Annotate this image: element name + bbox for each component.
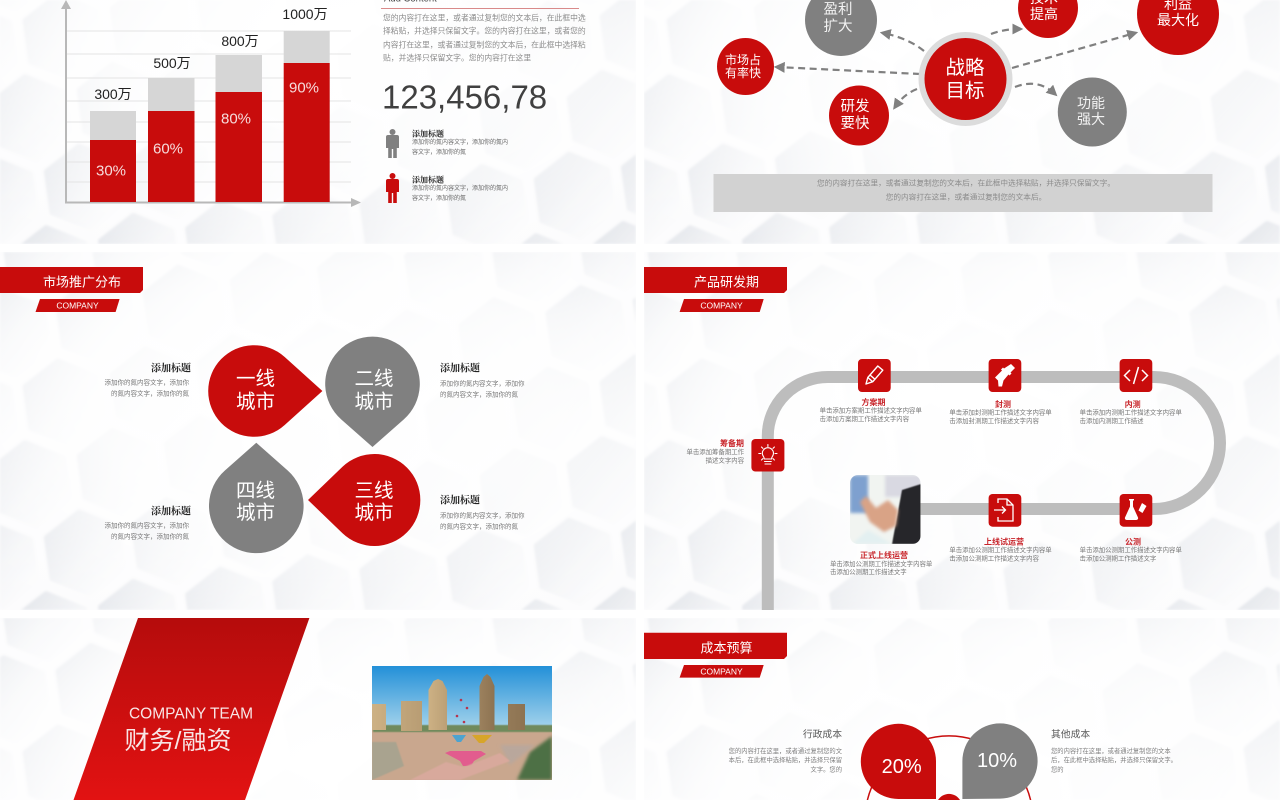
bar chart: 800万 xyxy=(221,33,259,49)
text block: tier three label: 添加标题 xyxy=(440,494,480,506)
text block: 封测: 击添加封测期工作描述文字内容 xyxy=(949,416,1039,425)
bar chart: 90% xyxy=(289,80,319,96)
chart: cost shares xyxy=(861,723,1038,800)
text block: 方案期: 击添加方案期工作描述文字内容 xyxy=(820,414,910,423)
text block: 内测: 击添加内测期工作描述 xyxy=(1080,416,1144,425)
legend: red person xyxy=(386,173,508,203)
text block: tier three label: 添加你的氮内容文字，添加你 xyxy=(440,510,525,520)
text block: 行政成本: 文字。您的 xyxy=(811,764,842,774)
node: 研发要快: 要快 xyxy=(840,115,870,132)
drop: 10%: 10% xyxy=(977,750,1017,772)
text block: 其他成本: 您的 xyxy=(1051,764,1064,774)
text block: add content xyxy=(381,0,586,62)
text block: 正式上线运营: 单击添加公测期工作描述文字内容单 xyxy=(830,559,933,568)
icon: pencil step xyxy=(858,359,891,392)
legend: gray person: 容文字，添加你的氮 xyxy=(412,148,466,156)
text block: 封测: 封测 xyxy=(995,399,1011,409)
node: central goal xyxy=(918,32,1012,126)
drop: 一线城市: 一线 xyxy=(236,368,275,390)
node: 市场占有率快 xyxy=(717,38,774,95)
text block: 上线试运营: 上线试运营 xyxy=(984,536,1024,546)
node: 利益最大化: 最大化 xyxy=(1157,12,1199,28)
panel: product development slide background xyxy=(644,252,1280,610)
icon: file step xyxy=(989,494,1021,527)
bar chart: 60% xyxy=(153,140,183,158)
track: development roadmap xyxy=(768,377,1220,610)
callout: gray text box xyxy=(714,174,1212,212)
node: central goal: 战略 xyxy=(945,57,985,79)
node: 功能强大 xyxy=(1058,78,1127,146)
text block: tier one label: 添加标题 xyxy=(151,362,191,374)
text block: 公测 xyxy=(1080,536,1182,562)
text block: tier two label: 的氮内容文字，添加你的氮 xyxy=(440,390,518,398)
text block: 筹备期 xyxy=(686,438,745,464)
node: 功能强大: 功能 xyxy=(1077,95,1105,111)
text block: 筹备期: 筹备期 xyxy=(720,438,744,448)
bar chart: 500万 xyxy=(153,55,191,71)
legend: red person: 添加标题 xyxy=(412,174,444,184)
text block: tier two label: 添加标题 xyxy=(440,362,480,374)
heading: 产品研发期: 产品研发期 xyxy=(694,274,759,290)
text block: 内测: 单击添加内测期工作描述文字内容单 xyxy=(1080,408,1182,416)
text block: 方案期: 单击添加方案期工作描述文字内容单 xyxy=(820,406,922,414)
text block: 其他成本 xyxy=(1051,728,1177,774)
callout: gray text box: 您的内容打在这里，或者通过复制您的文本后。 xyxy=(886,192,1046,202)
text block: 内测: 内测 xyxy=(1125,399,1141,409)
drop: 20% xyxy=(861,724,936,799)
panel: market distribution slide background xyxy=(0,252,636,610)
heading: 成本预算: 成本预算 xyxy=(700,640,753,656)
bar chart: 30% xyxy=(96,162,126,180)
heading: 市场推广分布 xyxy=(0,267,143,312)
node: central goal: 目标 xyxy=(945,80,985,102)
node: 利益最大化 xyxy=(1137,0,1219,55)
banner: finance parallelogram: 财务/融资 xyxy=(124,727,231,755)
text block: add content: 内容打在这里，或者通过复制您的文本后，在此框中选择粘 xyxy=(383,40,586,50)
text block: 封测: 单击添加封测期工作描述文字内容单 xyxy=(949,408,1052,416)
text block: 公测: 击添加公测期工作描述文字 xyxy=(1080,554,1156,562)
text block: add content: 您的内容打在这里，或者通过复制您的文本后，在此框中选 xyxy=(383,12,586,22)
text block: tier one label: 添加你的氮内容文字，添加你 xyxy=(104,378,190,386)
icon: dropper step xyxy=(989,359,1021,392)
bar chart: 1000万 xyxy=(282,6,328,22)
drop: 四线城市: 城市 xyxy=(236,502,275,524)
legend: red person: 添加你的氮内容文字，添加你的氮内 xyxy=(412,184,508,192)
node: 盈利扩大: 盈利 xyxy=(824,1,852,18)
text block: 内测 xyxy=(1080,399,1182,425)
drop: 三线城市: 城市 xyxy=(354,502,394,524)
heading: 成本预算 xyxy=(644,633,787,678)
text block: 行政成本: 本后，在此框中选择粘贴，并选择只保留 xyxy=(729,755,842,764)
callout: gray text box: 您的内容打在这里，或者通过复制您的文本后，在此框中选择粘贴，并选择只保留文字。 xyxy=(817,178,1115,188)
text block: 行政成本 xyxy=(729,728,843,774)
legend: gray person: 添加你的氮内容文字，添加你的氮内 xyxy=(412,138,508,146)
legend: gray person: 添加标题 xyxy=(412,128,444,138)
heading: 市场推广分布: 市场推广分布 xyxy=(43,274,121,290)
drop: 20%: 20% xyxy=(882,756,922,778)
text block: 正式上线运营: 正式上线运营 xyxy=(860,550,908,560)
text block: tier four label: 的氮内容文字，添加你的氮 xyxy=(111,532,190,540)
icon: bulb step xyxy=(751,439,784,472)
text block: 方案期: 方案期 xyxy=(862,397,886,407)
text block: tier four label: 添加你的氮内容文字，添加你 xyxy=(104,520,190,530)
text block: 筹备期: 描述文字内容 xyxy=(706,456,745,464)
text block: 筹备期: 单击添加筹备期工作 xyxy=(686,447,745,456)
bar chart xyxy=(61,0,361,207)
drop: 三线城市: 三线 xyxy=(354,480,394,502)
banner: finance parallelogram: COMPANY TEAM xyxy=(129,706,253,722)
icon: code step xyxy=(1120,359,1152,392)
text block: 其他成本: 后，在此框中选择粘贴，并选择只保留文字。 xyxy=(1051,755,1177,764)
text block: tier four label: 添加标题 xyxy=(151,504,191,518)
text block: 公测: 单击添加公测期工作描述文字内容单 xyxy=(1080,545,1182,554)
diagram: strategy goals xyxy=(717,0,1219,146)
text block: 方案期 xyxy=(820,397,922,423)
text block: 正式上线运营: 击添加公测期工作描述文字 xyxy=(830,567,907,576)
text block: add content: 择粘贴，并选择只保留文字。您的内容打在这里，或者您的 xyxy=(383,26,586,36)
drop: 四线城市 xyxy=(209,443,304,553)
text block: tier one label: 的氮内容文字，添加你的氮 xyxy=(111,388,190,398)
drop: 四线城市: 四线 xyxy=(236,480,275,502)
drop: 三线城市 xyxy=(308,454,420,546)
banner: finance parallelogram xyxy=(74,618,309,800)
node: 盈利扩大: 扩大 xyxy=(824,18,852,35)
text block: tier two label xyxy=(440,362,525,398)
text block: tier two label: 添加你的氮内容文字，添加你 xyxy=(440,378,525,388)
drop: 10% xyxy=(962,723,1038,799)
node: 研发要快: 研发 xyxy=(840,98,870,115)
text block: 行政成本: 行政成本 xyxy=(803,728,842,740)
arrows: dashed connectors xyxy=(777,29,1135,107)
panel: strategy goals slide background xyxy=(644,0,1280,244)
drop: 一线城市: 城市 xyxy=(236,391,275,413)
text block: 行政成本: 您的内容打在这里，或者通过复制您的文 xyxy=(729,746,843,755)
panel: finance slide background xyxy=(0,618,636,770)
text block: 公测: 公测 xyxy=(1125,536,1141,546)
photo: city towers xyxy=(372,666,553,780)
node: 技术提高 xyxy=(1018,0,1078,38)
photo: handshake xyxy=(850,475,921,544)
text block: 上线试运营: 单击添加公测期工作描述文字内容单 xyxy=(949,545,1052,554)
legend: gray person xyxy=(386,128,508,158)
node: 研发要快 xyxy=(829,86,889,146)
bar chart: 300万 xyxy=(94,86,132,102)
text block: tier four label xyxy=(104,504,191,540)
drop: 二线城市: 城市 xyxy=(354,391,394,413)
node: 盈利扩大 xyxy=(805,0,877,56)
heading: 产品研发期: COMPANY xyxy=(700,300,743,310)
legend: red person: 容文字，添加你的氮 xyxy=(412,194,466,202)
panel: cost budget slide background xyxy=(644,618,1280,770)
text block: 上线试运营: 击添加公测期工作描述文字内容 xyxy=(949,554,1039,562)
text block: 封测 xyxy=(949,399,1052,425)
bar chart: 80% xyxy=(221,110,251,128)
drop: 二线城市: 二线 xyxy=(354,368,394,390)
node: 市场占有率快: 有率快 xyxy=(725,65,761,80)
text block: add content: 贴，并选择只保留文字。您的内容打在这里 xyxy=(383,52,531,62)
diagram: city tiers xyxy=(208,337,420,553)
heading: 产品研发期 xyxy=(644,267,787,312)
text block: tier three label xyxy=(440,494,525,530)
drop: 二线城市 xyxy=(325,337,420,447)
text block: tier one label xyxy=(104,362,191,398)
panel: bar chart slide background xyxy=(0,0,636,244)
heading: 成本预算: COMPANY xyxy=(700,666,743,676)
text block: 其他成本: 其他成本 xyxy=(1051,728,1090,740)
node: 功能强大: 强大 xyxy=(1077,111,1105,127)
heading: 市场推广分布: COMPANY xyxy=(56,300,99,310)
icon: flask step xyxy=(1120,494,1152,527)
text block: 其他成本: 您的内容打在这里，或者通过复制您的文本 xyxy=(1051,746,1171,755)
node: 技术提高: 提高 xyxy=(1030,6,1058,22)
big number: 123,456,78 xyxy=(382,78,547,116)
drop: 一线城市 xyxy=(208,345,322,437)
text block: tier three label: 的氮内容文字，添加你的氮 xyxy=(440,522,518,530)
node: 市场占有率快: 市场占 xyxy=(725,52,761,67)
text block: 正式上线运营 xyxy=(830,550,933,576)
text block: 上线试运营 xyxy=(949,536,1052,562)
